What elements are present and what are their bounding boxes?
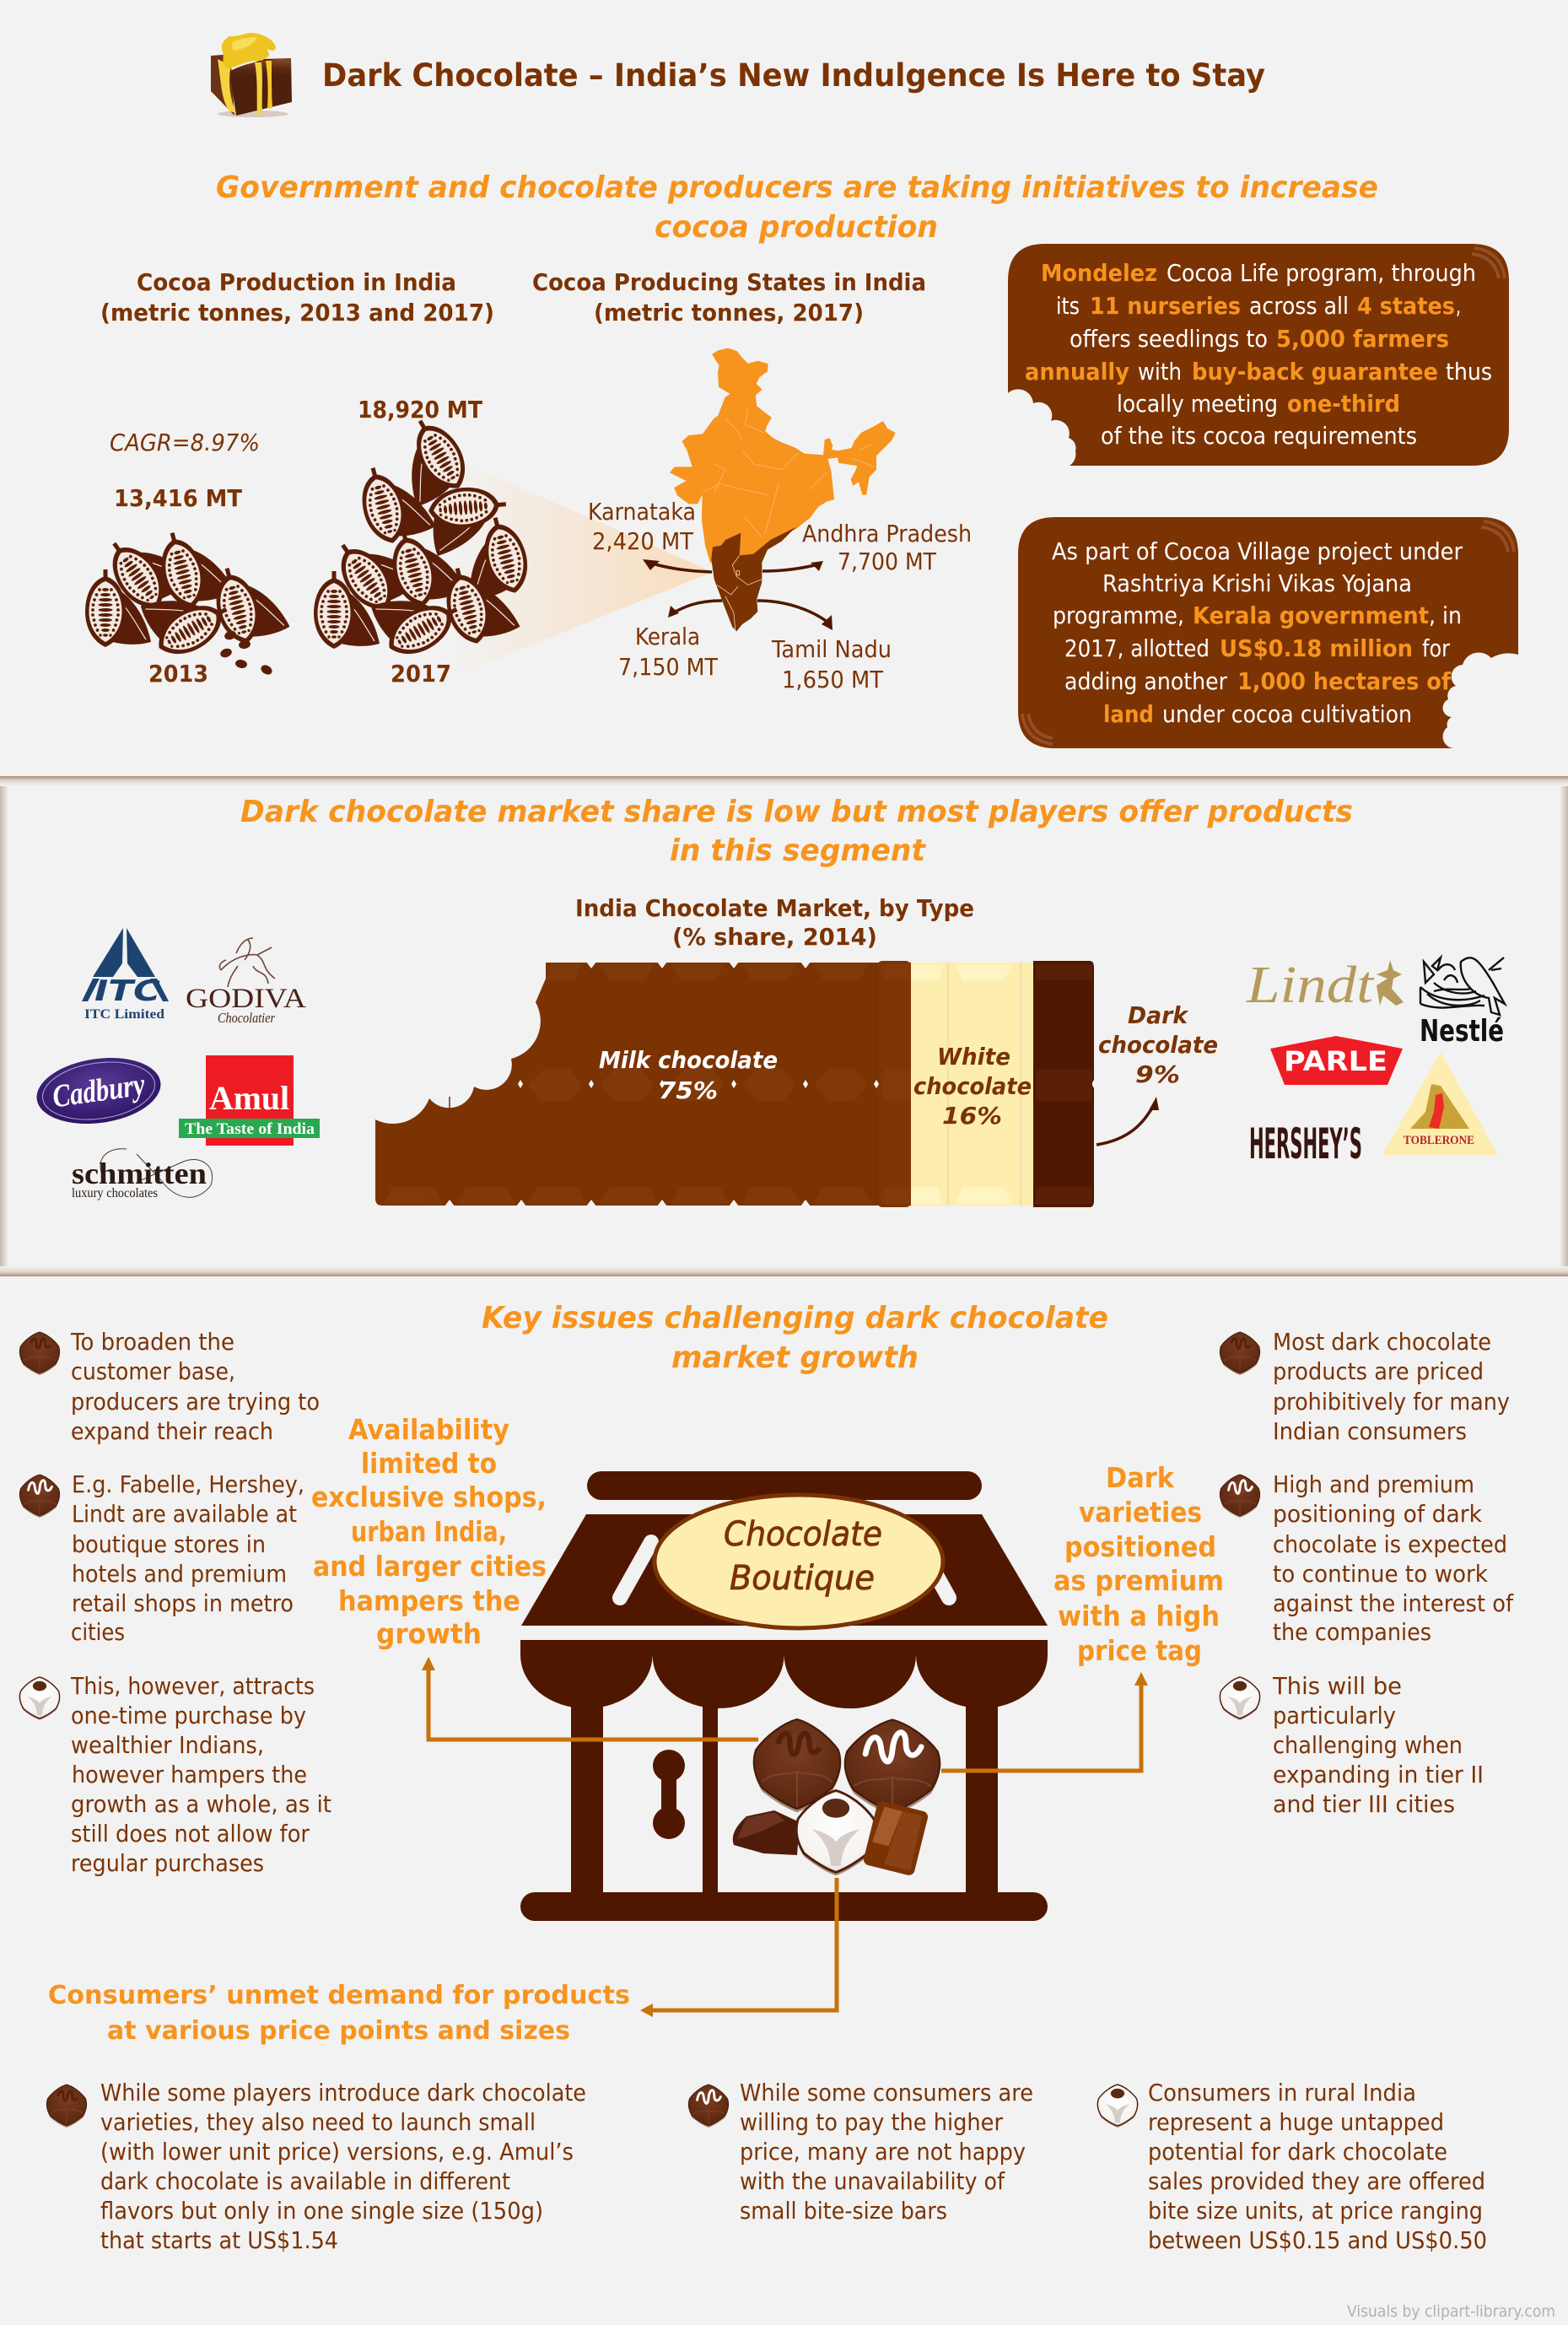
- panel: Kerala callout: adding another: [1064, 667, 1227, 695]
- text: premium positioning: positioning of dark: [1273, 1500, 1483, 1528]
- panel: Mondelez callout: locally meeting: [1117, 390, 1278, 418]
- text: bite-size bars: price, many are not happy: [740, 2138, 1026, 2166]
- icon: candy bullet right 1: [1220, 1332, 1260, 1375]
- panel: Kerala callout: US$0.18 million: [1220, 634, 1413, 662]
- value: 2013: 13,416 MT: [114, 484, 242, 512]
- callout wedge from pods to map: [447, 456, 713, 679]
- panel: Kerala callout: As part of Cocoa Village project under: [1052, 537, 1463, 565]
- text: bite-size bars: with the unavailability of: [740, 2167, 1005, 2195]
- panel: Kerala callout: under cocoa cultivation: [1162, 700, 1412, 728]
- text: boutique stores: cities: [71, 1618, 125, 1646]
- text: priced prohibitively: Indian consumers: [1273, 1417, 1467, 1445]
- arrow: unmet demand connector: [640, 1878, 837, 2017]
- arrow: dark chocolate: [1097, 1097, 1159, 1145]
- logo: Parle: PARLE: [1284, 1045, 1387, 1077]
- arrow: Kerala: [668, 601, 722, 618]
- text: tier II and III challenge: particularly: [1273, 1702, 1396, 1729]
- panel: Mondelez callout: thus: [1446, 358, 1492, 386]
- shop sign: Chocolate: [724, 1515, 882, 1554]
- text: premium positioning: High and premium: [1273, 1470, 1474, 1498]
- text: rural India: potential for dark chocolate: [1148, 2138, 1447, 2166]
- text: rural India: represent a huge untapped: [1148, 2108, 1444, 2136]
- arrow: Tamil Nadu: [757, 601, 832, 630]
- text: bite-size bars: While some consumers are: [740, 2079, 1033, 2107]
- label: Karnataka: 2,420 MT: [592, 527, 694, 555]
- callout: availability: growth: [376, 1617, 482, 1650]
- text: bite-size bars: [740, 2079, 1033, 2225]
- logo: Cadbury: [32, 1050, 165, 1131]
- callout: unmet demand: at various price points and sizes: [107, 2016, 570, 2046]
- icon: candy bullet bottom 3: [1097, 2085, 1138, 2128]
- chart heading: producing states: [532, 268, 926, 326]
- text: boutique stores: hotels and premium: [72, 1560, 287, 1588]
- chart heading: cocoa production: Cocoa Production in India: [137, 268, 456, 296]
- chart heading: India chocolate market: (% share, 2014): [672, 923, 877, 951]
- panel: Kerala callout: 2017, allotted: [1064, 634, 1210, 662]
- logo: Amul: The Taste of India: [185, 1120, 315, 1138]
- arrow: Karnataka: [643, 559, 712, 572]
- panel: Mondelez callout: 4 states: [1357, 292, 1455, 320]
- icon: candy bullet bottom 2: [688, 2085, 729, 2128]
- chart heading: cocoa production: [100, 268, 494, 326]
- title: Dark Chocolate – India’s New Indulgence Is Here to Stay: [322, 57, 1265, 94]
- panel: Mondelez callout: offers seedlings to: [1070, 325, 1268, 353]
- text: boutique stores: [71, 1470, 304, 1646]
- text: small versions: flavors but only in one single size (150g): [100, 2197, 543, 2225]
- label: Tamil Nadu: [771, 635, 892, 693]
- panel: Kerala callout: 1,000 hectares of: [1237, 667, 1452, 695]
- text: premium positioning: [1273, 1470, 1514, 1646]
- panel: Mondelez callout: Mondelez: [1041, 259, 1157, 287]
- text: tier II and III challenge: expanding in tier II: [1273, 1761, 1484, 1788]
- icon: candy bullet right 3: [1220, 1677, 1260, 1720]
- text: one-time purchase: growth as a whole, as it: [71, 1790, 331, 1818]
- callout: premium price: with a high: [1058, 1599, 1220, 1632]
- chart heading: producing states: Cocoa Producing States in India: [532, 268, 926, 296]
- text: boutique stores: E.g. Fabelle, Hershey,: [72, 1470, 304, 1498]
- chart: chocolate bar market share: [375, 961, 1094, 1207]
- text: small versions: dark chocolate is available in different: [100, 2167, 510, 2195]
- logo: Amul: [179, 1055, 320, 1146]
- text: rural India: between US$0.15 and US$0.50: [1148, 2226, 1487, 2254]
- label: white chocolate: chocolate: [913, 1072, 1032, 1100]
- arrow: Andhra Pradesh: [762, 561, 823, 571]
- text: small versions: that starts at US$1.54: [100, 2226, 338, 2254]
- CAGR label: CAGR=8.97%: [110, 429, 260, 456]
- panel: Kerala callout: , in: [1429, 601, 1462, 629]
- text: boutique stores: retail shops in metro: [72, 1589, 294, 1617]
- label: milk chocolate: [599, 1046, 778, 1104]
- callout: availability: and larger cities: [313, 1550, 547, 1583]
- year label 2017: 2017: [391, 660, 451, 688]
- chart heading: producing states: (metric tonnes, 2017): [594, 299, 864, 326]
- label: Karnataka: [588, 498, 696, 555]
- icon: candy bullet left 2: [19, 1475, 60, 1518]
- logo: Toblerone: [1382, 1052, 1498, 1155]
- text: small versions: [100, 2079, 586, 2254]
- label: Andhra Pradesh: [802, 520, 972, 575]
- panel: Kerala callout: Kerala government: [1193, 601, 1429, 629]
- text: premium positioning: the companies: [1273, 1618, 1431, 1646]
- panel: Mondelez callout: one-third: [1287, 390, 1400, 418]
- text: premium positioning: chocolate is expected: [1273, 1530, 1507, 1558]
- label: Andhra Pradesh: Andhra Pradesh: [802, 520, 972, 548]
- label: Kerala: 7,150 MT: [618, 653, 719, 681]
- text: small versions: While some players introduce dark chocolate: [100, 2079, 586, 2107]
- label: dark chocolate: chocolate: [1098, 1031, 1218, 1059]
- text: rural India: [1148, 2079, 1487, 2254]
- panel: Mondelez callout: ,: [1456, 292, 1461, 320]
- panel: Kerala callout: Rashtriya Krishi Vikas Yojana: [1102, 569, 1412, 597]
- icon: chocolate gift box: [211, 33, 292, 117]
- text: one-time purchase: however hampers the: [72, 1761, 307, 1788]
- logo: Schmitten: schmitten: [72, 1157, 207, 1190]
- text: small versions: (with lower unit price) versions, e.g. Amul’s: [100, 2138, 574, 2166]
- logo: Godiva: GODIVA: [186, 984, 306, 1014]
- label: Tamil Nadu: Tamil Nadu: [771, 635, 892, 663]
- text: bite-size bars: small bite-size bars: [740, 2197, 947, 2225]
- text: rural India: Consumers in rural India: [1148, 2079, 1416, 2107]
- text: priced prohibitively: [1273, 1328, 1510, 1445]
- bar segment: dark chocolate: [1033, 961, 1094, 1207]
- text: bite-size bars: willing to pay the higher: [740, 2108, 1003, 2136]
- label: Kerala: Kerala: [635, 623, 700, 650]
- callout: unmet demand: Consumers’ unmet demand for products: [48, 1981, 630, 2010]
- heading: market share: Dark chocolate market share is low but most players offer products: [240, 795, 1353, 829]
- chart heading: cocoa production: (metric tonnes, 2013 and 2017): [100, 299, 494, 326]
- heading: market share: in this segment: [670, 833, 927, 868]
- logo: Lindt: Lindt: [1246, 957, 1375, 1014]
- callout: premium price: as premium: [1053, 1564, 1224, 1597]
- label: milk chocolate: Milk chocolate: [599, 1046, 778, 1074]
- bar segment: milk chocolate: [375, 961, 911, 1207]
- logo: Nestle: [1420, 958, 1505, 1049]
- text: small versions: varieties, they also need to launch small: [100, 2108, 536, 2136]
- text: rural India: sales provided they are offered: [1148, 2167, 1485, 2195]
- panel: Mondelez callout: with: [1138, 358, 1182, 386]
- panel: Kerala callout: programme,: [1053, 601, 1184, 629]
- callout: availability: [311, 1413, 547, 1650]
- text: priced prohibitively: Most dark chocolate: [1273, 1328, 1491, 1356]
- panel: Mondelez callout: 5,000 farmers: [1276, 325, 1449, 353]
- text: broaden customer base: producers are trying to: [71, 1388, 320, 1416]
- logo: Nestle: Nestlé: [1420, 1014, 1504, 1049]
- callout: premium price: varieties: [1079, 1496, 1202, 1529]
- callout: availability: urban India,: [351, 1515, 507, 1548]
- logo: Godiva: Chocolatier: [218, 1010, 275, 1026]
- text: broaden customer base: customer base,: [71, 1357, 235, 1385]
- label: Andhra Pradesh: 7,700 MT: [838, 548, 937, 575]
- heading: cocoa production: cocoa production: [655, 210, 938, 245]
- text: priced prohibitively: prohibitively for many: [1273, 1388, 1510, 1416]
- value: 2017: 18,920 MT: [358, 396, 482, 423]
- icon: candy bullet left 1: [19, 1332, 60, 1375]
- shop sign: Boutique: [730, 1559, 875, 1598]
- label: white chocolate: [913, 1043, 1032, 1130]
- label: dark chocolate: 9%: [1135, 1060, 1180, 1088]
- panel: Mondelez callout: [1008, 244, 1509, 466]
- arrow: availability connector: [422, 1657, 758, 1740]
- heading: cocoa production: Government and chocolate producers are taking initiatives to increase: [216, 170, 1378, 205]
- panel: Mondelez callout: across all: [1249, 292, 1349, 320]
- label: dark chocolate: [1098, 1001, 1218, 1088]
- callout: premium price: positioned: [1064, 1530, 1216, 1563]
- panel: Mondelez callout: of the its cocoa requirements: [1101, 422, 1417, 450]
- text: boutique stores: boutique stores in: [72, 1530, 266, 1558]
- icon: chocolates assortment: [733, 1719, 940, 1876]
- logo: ITC: ITC: [94, 974, 160, 1008]
- panel: Mondelez callout: buy-back guarantee: [1192, 358, 1438, 386]
- logo: Lindt: [1246, 957, 1404, 1014]
- callout: premium price: [1053, 1461, 1224, 1667]
- label: Kerala: [618, 623, 719, 681]
- heading: key issues: market growth: [671, 1341, 919, 1375]
- callout: availability: limited to: [361, 1447, 497, 1480]
- callout: availability: Availability: [348, 1413, 509, 1446]
- text: broaden customer base: [70, 1328, 320, 1445]
- text: premium positioning: against the interest of: [1273, 1589, 1514, 1617]
- label: white chocolate: 16%: [942, 1102, 1002, 1130]
- label: white chocolate: White: [937, 1043, 1010, 1071]
- text: priced prohibitively: products are priced: [1273, 1357, 1484, 1385]
- callout: premium price: price tag: [1077, 1634, 1202, 1667]
- infographic canvas: HERSHEY’S: [1249, 1119, 1362, 1168]
- logo: Cadbury: Cadbury: [51, 1067, 147, 1114]
- icon: candy bullet bottom 1: [46, 2085, 87, 2128]
- shop sign: [655, 1495, 943, 1628]
- logo: Amul: Amul: [209, 1079, 289, 1117]
- label: milk chocolate: 75%: [659, 1076, 718, 1104]
- icon: chocolate shop: [520, 1471, 1048, 1921]
- panel: Kerala callout: land: [1103, 700, 1154, 728]
- logo: Schmitten: luxury chocolates: [72, 1186, 158, 1200]
- label: Karnataka: Karnataka: [588, 498, 696, 526]
- icon: cocoa pods 2017: [314, 411, 535, 666]
- text: premium positioning: to continue to work: [1273, 1560, 1489, 1588]
- text: tier II and III challenge: and tier III cities: [1273, 1790, 1455, 1818]
- callout: premium price: Dark: [1106, 1461, 1175, 1494]
- panel: Mondelez callout: 11 nurseries: [1090, 292, 1241, 320]
- text: boutique stores: Lindt are available at: [72, 1500, 297, 1528]
- panel: Kerala callout: [1018, 517, 1518, 748]
- panel: market share section edges: [0, 776, 1568, 1276]
- text: tier II and III challenge: This will be: [1272, 1672, 1402, 1700]
- logo: Toblerone: TOBLERONE: [1404, 1134, 1474, 1147]
- panel: Mondelez callout: Cocoa Life program, through: [1167, 259, 1476, 287]
- label: Tamil Nadu: 1,650 MT: [782, 666, 884, 693]
- text: broaden customer base: To broaden the: [70, 1328, 234, 1356]
- chart heading: India chocolate market: India Chocolate Market, by Type: [575, 894, 974, 922]
- icon: cocoa pods 2013: [85, 517, 291, 677]
- heading: key issues: [482, 1301, 1108, 1375]
- map of India: [671, 348, 895, 631]
- icon: candy bullet right 2: [1220, 1475, 1260, 1518]
- callout: availability: hampers the: [338, 1584, 520, 1617]
- text: one-time purchase: This, however, attracts: [70, 1672, 315, 1700]
- callout: unmet demand: [48, 1981, 630, 2046]
- text: one-time purchase: [70, 1672, 331, 1877]
- arrow: premium connector: [941, 1672, 1148, 1771]
- logo: ITC: ITC Limited: [84, 1007, 164, 1022]
- icon: candy bullet left 3: [19, 1677, 60, 1720]
- text: tier II and III challenge: challenging when: [1273, 1731, 1463, 1759]
- text: broaden customer base: expand their reach: [71, 1417, 273, 1445]
- panel: Mondelez callout: annually: [1025, 358, 1129, 386]
- text: one-time purchase: wealthier Indians,: [71, 1731, 264, 1759]
- chart heading: India chocolate market: [575, 894, 974, 951]
- heading: key issues: Key issues challenging dark chocolate: [482, 1301, 1108, 1335]
- logo: Godiva: [186, 938, 306, 1026]
- bar segment: white chocolate: [911, 963, 1033, 1206]
- logo: Schmitten: [72, 1149, 213, 1200]
- year label 2013: 2013: [148, 660, 208, 688]
- text: one-time purchase: regular purchases: [71, 1849, 264, 1877]
- logo: Parle: [1270, 1036, 1403, 1085]
- logo: ITC: [82, 928, 169, 1022]
- heading: market share: [240, 795, 1353, 868]
- text: rural India: bite size units, at price ranging: [1148, 2197, 1483, 2225]
- panel: Mondelez callout: its: [1056, 292, 1080, 320]
- heading: cocoa production: [216, 170, 1378, 245]
- callout: availability: exclusive shops,: [311, 1481, 547, 1513]
- panel: Kerala callout: for: [1422, 634, 1450, 662]
- text: one-time purchase: still does not allow for: [71, 1820, 310, 1848]
- text: one-time purchase: one-time purchase by: [71, 1702, 306, 1729]
- text: tier II and III challenge: [1272, 1672, 1484, 1818]
- label: dark chocolate: Dark: [1128, 1001, 1189, 1029]
